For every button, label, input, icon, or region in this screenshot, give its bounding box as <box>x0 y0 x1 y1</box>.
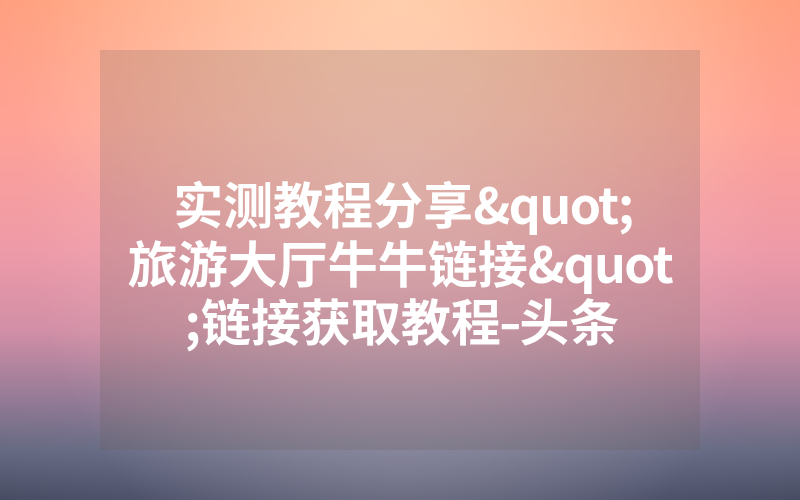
title: ;链接获取教程 头条 <box>185 284 619 356</box>
title: 旅游大厅牛牛链接&quot <box>128 226 672 298</box>
title: 实测教程分享&quot; <box>173 167 633 239</box>
title: - <box>499 284 522 356</box>
panel: translucent overlay <box>100 50 700 450</box>
title <box>128 167 673 356</box>
